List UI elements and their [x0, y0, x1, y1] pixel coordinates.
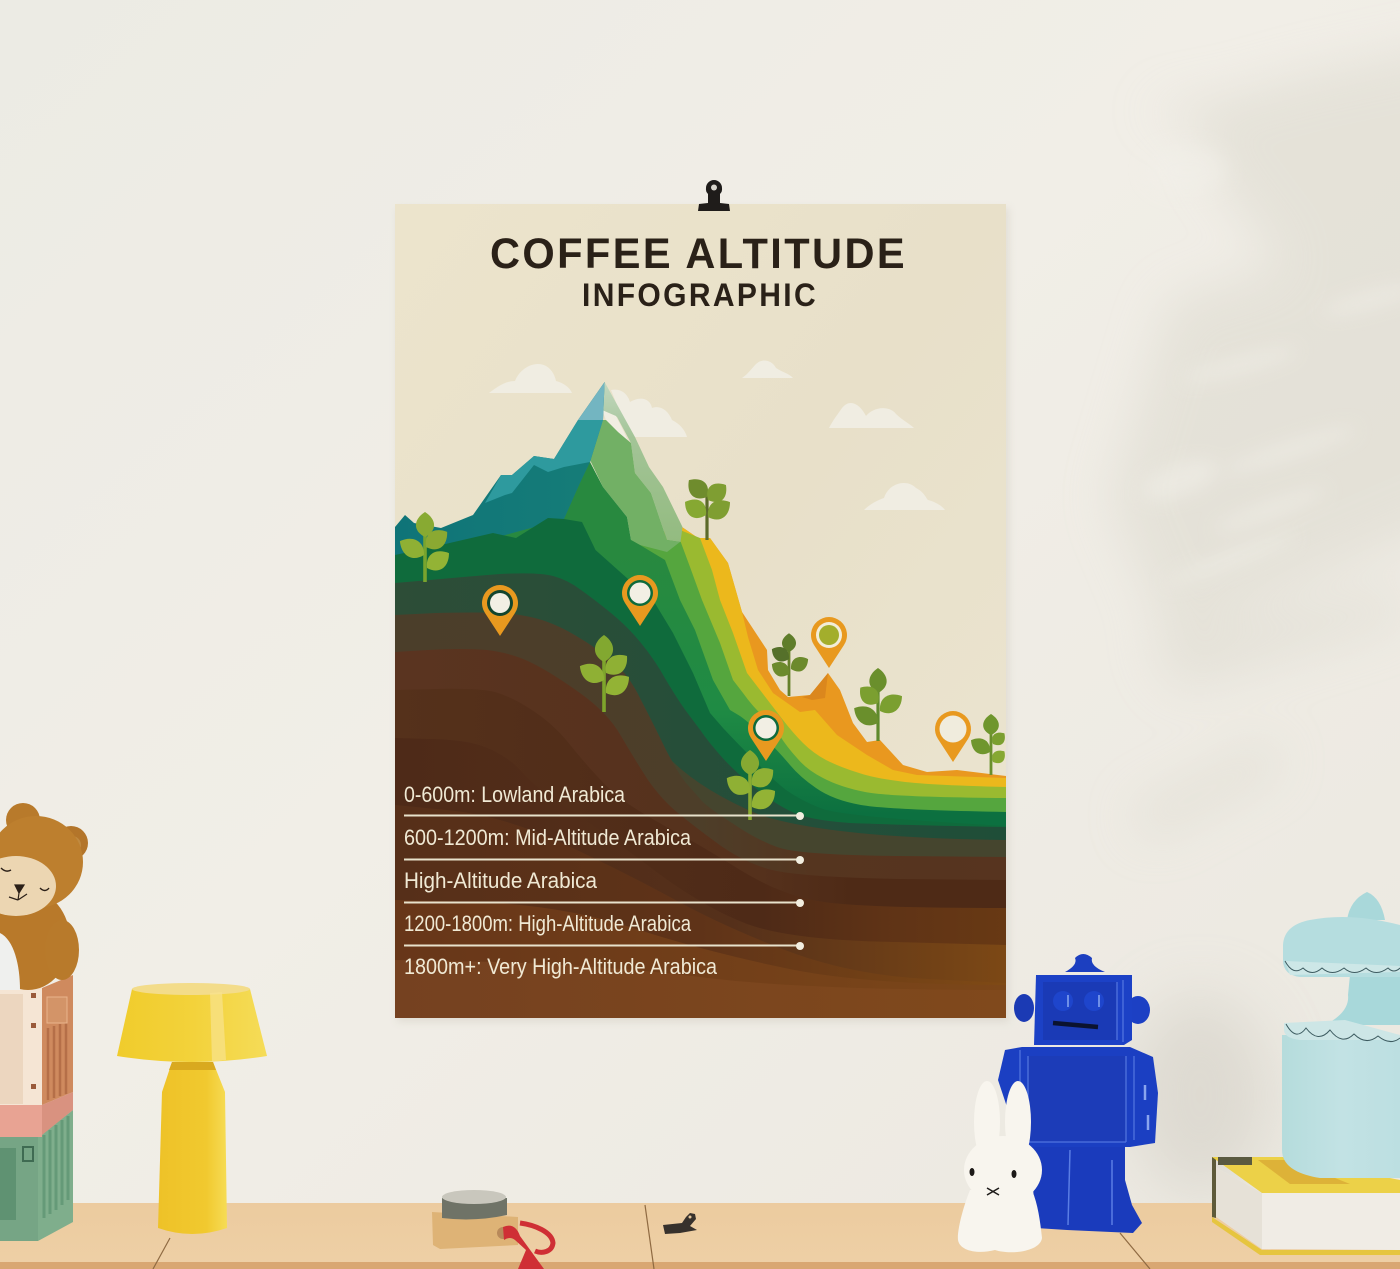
rabbit face: [970, 1168, 1016, 1195]
grey tape roll: [442, 1198, 507, 1219]
layer: yellow slope: [395, 527, 1006, 1018]
icon: plant far right: [967, 714, 1009, 775]
book: [1212, 1157, 1400, 1255]
peak: bright teal ridge: [485, 420, 603, 503]
shelf: [0, 1203, 1400, 1269]
wooden block: [432, 1212, 518, 1249]
peak: pale green face: [602, 382, 682, 542]
book pages: [1215, 1167, 1400, 1250]
icon: plant by hump: [768, 633, 812, 696]
icon: location pin 3: [811, 617, 847, 668]
book top cover: [1212, 1157, 1400, 1193]
icon: location pin 1: [482, 585, 518, 636]
icon: plant far left: [395, 512, 454, 582]
bear ears: [6, 803, 40, 837]
layer: green slope: [395, 540, 1006, 1018]
peak: pale blue tip: [578, 382, 605, 420]
icon: plant mid soil: [575, 635, 634, 712]
small clip on shelf: [663, 1213, 697, 1234]
layer: dark brown: [395, 689, 1006, 1018]
lamp shade: [117, 989, 267, 1062]
bear arm: [45, 920, 79, 980]
bear body: [0, 890, 70, 990]
layer: warm brown: [395, 900, 1006, 1018]
pink band: [0, 1092, 73, 1137]
ceramic blue jar: [1282, 892, 1400, 1178]
layer: umber: [395, 738, 1006, 1018]
teddy bear: [0, 803, 88, 990]
layer: dark teal: [395, 573, 1006, 1018]
legend row: 1200-1800m: 1200-1800m: High-Altitude Arabica: [404, 911, 692, 936]
legend row: lowland: 0-600m: Lowland Arabica: [404, 782, 626, 807]
title: [490, 230, 907, 313]
layer: sienna: [395, 805, 1006, 1018]
icon: plant on ridge: [680, 474, 735, 540]
title: INFOGRAPHIC: [582, 277, 818, 313]
layer: mid green: [395, 462, 1006, 1018]
blue robot: [998, 954, 1158, 1233]
white rabbit figurine: [958, 1081, 1042, 1252]
center shelf objects: [432, 1190, 697, 1269]
robot eyes: [1053, 991, 1073, 1011]
lamp base: [158, 1062, 227, 1234]
icon: location pin 5: [935, 711, 971, 762]
green crate: [0, 1110, 73, 1241]
cream crate: [0, 975, 73, 1105]
rabbit head: [964, 1136, 1042, 1204]
book spine edge: [1212, 1157, 1216, 1218]
bear face: [0, 856, 56, 916]
layer: dark green: [395, 518, 1006, 1018]
icon: poster clip: [698, 180, 730, 211]
wall shadows behind objects: [1130, 995, 1270, 1195]
jar base: [1282, 1035, 1400, 1178]
peak: light green face: [590, 420, 680, 552]
icon: plant at valley: [722, 750, 780, 820]
jar neck: [1325, 975, 1400, 1025]
legend row: high altitude: [404, 868, 804, 907]
icon: location pin 4: [748, 710, 784, 761]
robot legs: [1030, 1147, 1142, 1233]
jar knob: [1347, 892, 1385, 920]
foliage shadow on wall: [1110, 20, 1400, 840]
layer: olive strip: [395, 757, 1006, 1018]
bear head: [0, 816, 83, 908]
rabbit ears: [974, 1081, 1000, 1163]
layer: brown: [395, 649, 1006, 1018]
layer: yellow-green slope: [395, 530, 1006, 1018]
legend row: mid altitude: 600-1200m: Mid-Altitude Arabica: [404, 825, 692, 850]
jar rim with scallops: [1284, 1020, 1400, 1040]
layer: olive brown: [395, 612, 1006, 1018]
book lower cover: [1212, 1217, 1400, 1255]
crates stack: [0, 975, 73, 1241]
robot head: [1034, 975, 1132, 1045]
rabbit body: [958, 1190, 1042, 1252]
legend row: very high: 1800m+: Very High-Altitude Arabica: [404, 954, 718, 979]
poster paper: [395, 204, 1006, 1018]
jar lid: [1283, 917, 1400, 977]
clouds: [489, 361, 945, 510]
legend row: lowland: [404, 782, 804, 820]
peak: teal face: [395, 382, 605, 565]
peak: snow patch: [602, 410, 630, 445]
mountain and strata: [395, 382, 1006, 1018]
altitude legend: [404, 782, 804, 979]
red ribbon: [497, 1223, 553, 1269]
yellow lamp: [117, 983, 267, 1234]
robot antenna: [1065, 954, 1105, 972]
legend row: 1200-1800m: [404, 911, 804, 950]
icon: plant lower slope: [850, 668, 907, 741]
robot mouth slot: [1053, 1023, 1098, 1027]
layer: bottom brown: [395, 960, 1006, 1018]
legend row: mid altitude: [404, 825, 804, 864]
robot body: [998, 1047, 1158, 1147]
robot ears: [1014, 994, 1034, 1022]
poster: [395, 204, 1009, 1022]
icon: location pin 2: [622, 575, 658, 626]
legend row: high altitude: High-Altitude Arabica: [404, 868, 598, 893]
layer: orange slope: [395, 527, 1006, 1018]
poster shadow: [397, 208, 1009, 1022]
white toy: [0, 933, 20, 990]
title: COFFEE ALTITUDE: [490, 230, 907, 278]
